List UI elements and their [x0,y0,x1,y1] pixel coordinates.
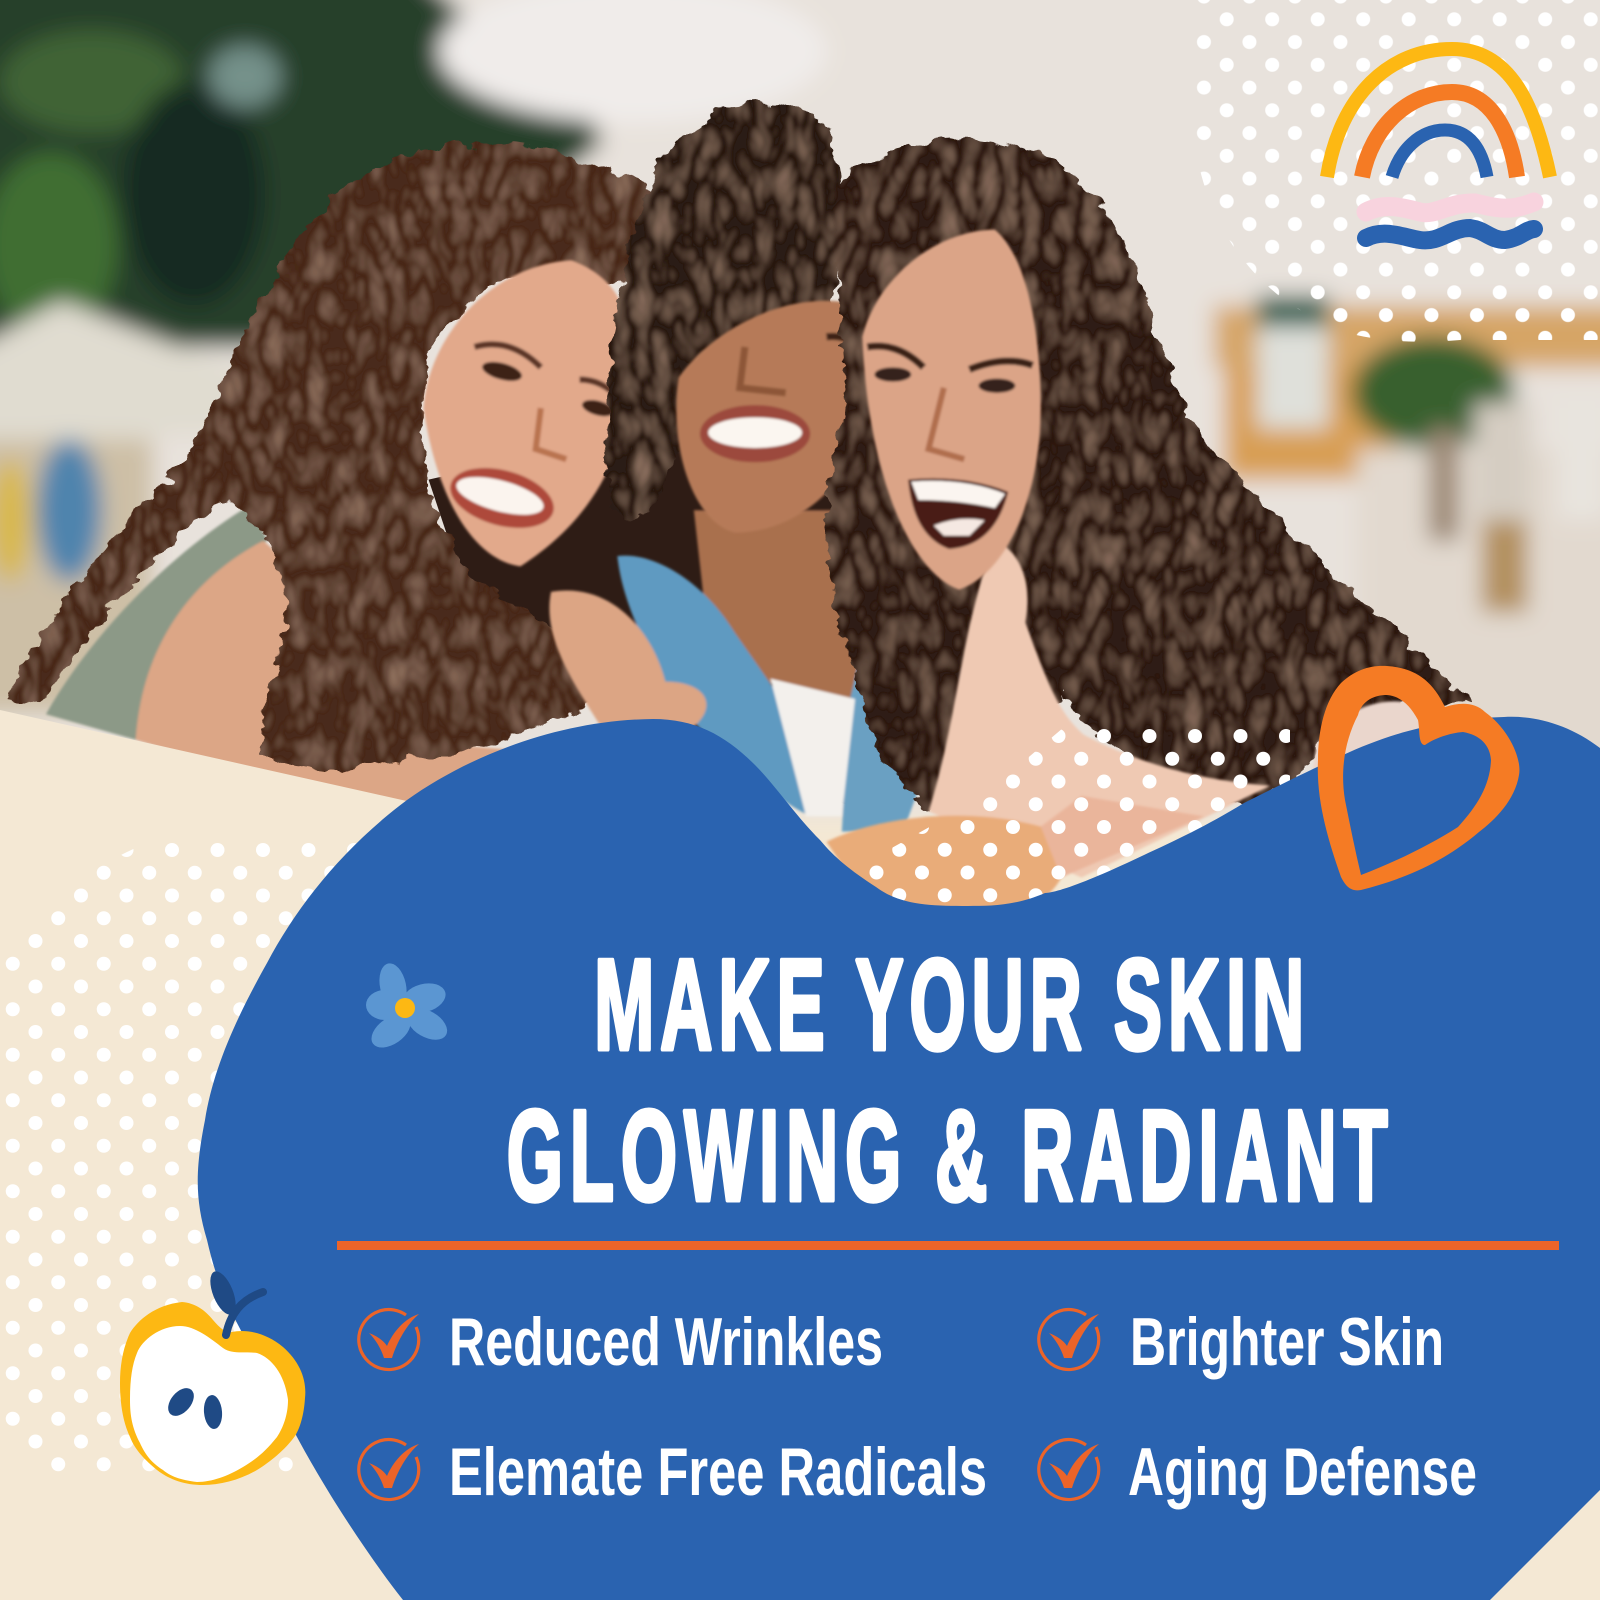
dot pattern: top right [1190,0,1600,342]
woman on the right: pink shirt and arm [827,541,1449,913]
benefit: aging defense [1039,1434,1477,1510]
woman on the left: hair [5,144,663,769]
icon: orange heart [1318,666,1519,890]
benefit: elemate free radicals: Elemate Free Radicals [449,1434,987,1510]
title: MAKE YOUR SKIN [594,933,1304,1077]
benefit: reduced wrinkles: Reduced Wrinkles [449,1304,883,1380]
woman on the left: face [423,260,632,566]
benefit: brighter skin: Brighter Skin [1130,1304,1444,1380]
icon: apple slice [120,1268,305,1485]
benefit: aging defense: Aging Defense [1128,1434,1477,1510]
woman on the right: hair [828,137,1469,806]
icon: blue flower [366,961,453,1054]
woman on the right: face [862,230,1041,590]
blue blob panel [198,717,1600,1600]
woman in the middle: neck, denim shirt and tee [549,510,939,832]
dot pattern: over the arm and shirt [860,722,1290,920]
photo: three laughing women outdoors [0,0,1600,913]
title: GLOWING & RADIANT [507,1084,1388,1228]
beige background wedge [0,710,1600,1600]
benefit: reduced wrinkles [359,1304,883,1380]
benefit: elemate free radicals [359,1434,987,1510]
shadow under the faces [429,429,949,816]
icon: rainbow and waves [1327,49,1550,240]
benefit: brighter skin [1039,1304,1444,1380]
divider line [337,1241,1559,1250]
blurred street background [0,0,1600,816]
woman on the left: green top and shoulder [46,505,571,827]
title [507,933,1388,1228]
woman in the middle: face [676,301,867,533]
woman in the middle: hair [607,103,841,516]
dot pattern: left beige area [0,838,400,1472]
